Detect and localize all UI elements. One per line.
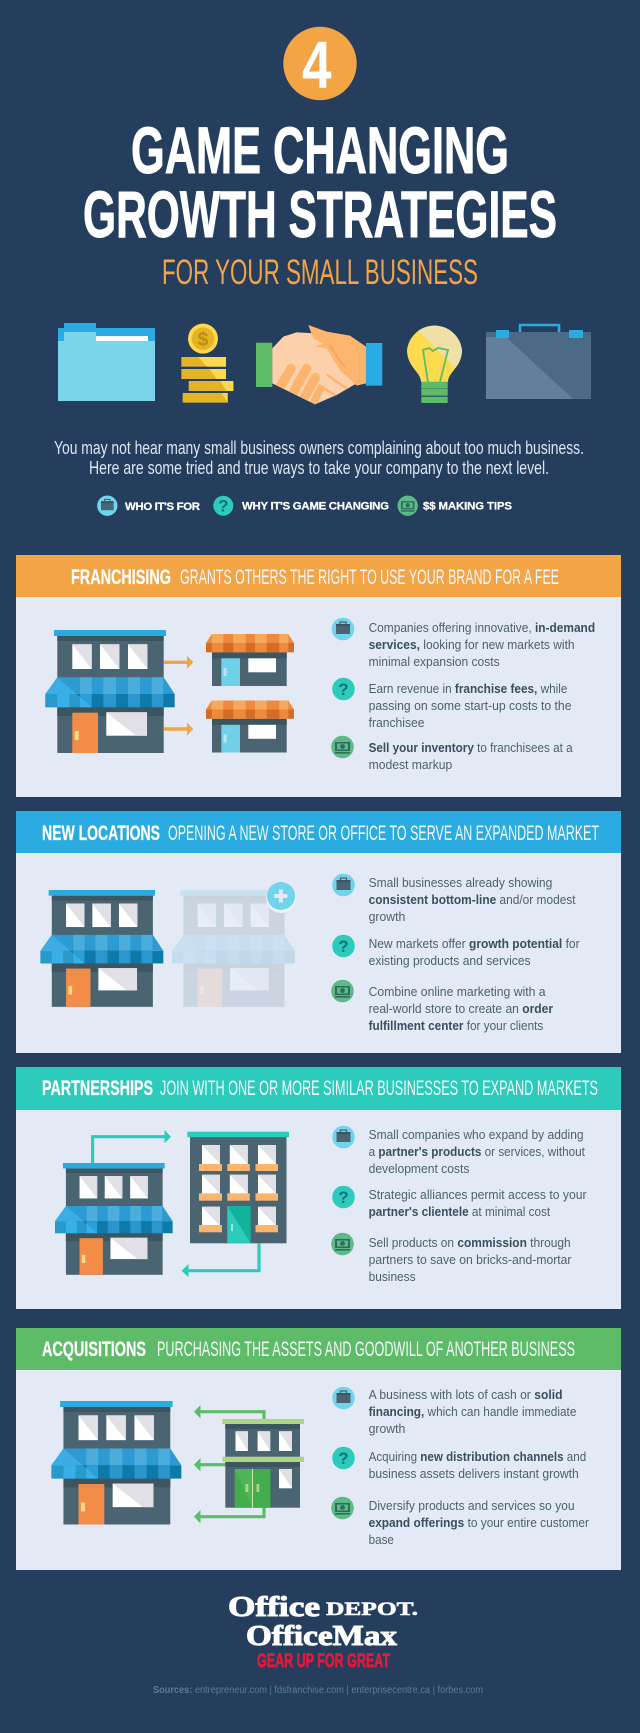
bullet: money making tip: [331, 980, 553, 1033]
icon: folder: [58, 323, 155, 401]
legend item: why it's game changing: [213, 496, 389, 516]
bullet: who it's for: A business with lots of cash or solid: [369, 1387, 563, 1402]
bullet: why it's game changing: existing products and services: [369, 953, 531, 968]
bullet: who it's for: [332, 874, 576, 924]
header: partnerships: [16, 1067, 621, 1110]
logo: Office Depot OfficeMax: [228, 1591, 418, 1672]
bullet: why it's game changing: Strategic alliances permit access to your: [369, 1187, 587, 1202]
panel: acquisitions: [16, 1328, 621, 1570]
header: new locations: NEW LOCATIONS: [42, 822, 160, 845]
bullet: why it's game changing: [332, 1447, 586, 1481]
bullet: who it's for: Companies offering innovative, in-demand: [369, 620, 595, 635]
logo: Office Depot OfficeMax: Office: [228, 1591, 320, 1623]
illustration: store and partner building: [55, 1130, 289, 1277]
sources: Sources: entrepreneur.com | fdsfranchise.com | enterprisecentre.ca | forbes.com: [153, 1685, 483, 1696]
illustration: store and ghost new store: [40, 882, 296, 1007]
illustration: store acquiring a smaller building: [51, 1401, 304, 1524]
bullet: why it's game changing: ?: [338, 1449, 349, 1468]
header: acquisitions: ACQUISITIONS: [42, 1338, 146, 1361]
bullet: money making tip: fulfillment center for your clients: [369, 1018, 544, 1033]
legend: [97, 496, 512, 516]
bullet: money making tip: business: [369, 1269, 416, 1284]
logo: Office Depot OfficeMax: GEAR UP FOR GREAT: [257, 1651, 390, 1672]
intro text: [54, 438, 584, 478]
bullet: money making tip: [331, 736, 573, 772]
bullet: money making tip: real-world store to create an order: [369, 1001, 553, 1016]
bullet: money making tip: expand offerings to your entire customer: [369, 1515, 590, 1530]
bullet: why it's game changing: partner's clientele at minimal cost: [369, 1204, 551, 1219]
bullet: who it's for: Small companies who expand by adding: [369, 1127, 584, 1142]
bullet: who it's for: [332, 618, 595, 669]
bullet: why it's game changing: [332, 678, 572, 730]
bullet: who it's for: services, looking for new markets with: [369, 637, 575, 652]
panel: partnerships: [16, 1067, 621, 1309]
header: acquisitions: [16, 1328, 621, 1370]
bullet: why it's game changing: Acquiring new distribution channels and: [369, 1449, 586, 1464]
logo: Office Depot OfficeMax: OfficeMax: [246, 1620, 398, 1652]
bullet: who it's for: minimal expansion costs: [369, 654, 500, 669]
badge: number 4: [283, 27, 357, 103]
icon: handshake: [256, 325, 382, 407]
bullet: why it's game changing: ?: [338, 937, 349, 956]
bullet: who it's for: development costs: [369, 1161, 470, 1176]
legend item: making tips: $$ MAKING TIPS: [423, 500, 512, 512]
bullet: who it's for: consistent bottom-line and/or modest: [369, 892, 576, 907]
panel: new locations: [16, 811, 621, 1053]
bullet: why it's game changing: passing on some start-up costs to the: [369, 698, 572, 713]
bullet: money making tip: partners to save on bricks-and-mortar: [369, 1252, 572, 1267]
bullet: who it's for: [332, 1126, 585, 1176]
legend item: who it's for: [97, 496, 200, 516]
header: new locations: [16, 811, 621, 853]
header: franchising: [16, 555, 621, 597]
bullet: why it's game changing: ?: [338, 680, 349, 699]
bullet: why it's game changing: business assets delivers instant growth: [369, 1466, 579, 1481]
bullet: who it's for: Small businesses already showing: [369, 875, 552, 890]
illustration: store with franchise shops: [45, 630, 294, 753]
header: partnerships: PARTNERSHIPS: [42, 1077, 153, 1100]
bullet: money making tip: base: [369, 1532, 394, 1547]
title: [83, 113, 557, 251]
bullet: money making tip: Sell your inventory to franchisees at a: [369, 740, 573, 755]
icon: light bulb: [407, 326, 462, 403]
icon: coins: $: [198, 330, 209, 351]
bullet: who it's for: [332, 1387, 576, 1436]
legend item: why it's game changing: ?: [218, 496, 228, 516]
bullet: why it's game changing: ?: [338, 1188, 349, 1207]
bullet: who it's for: growth: [369, 1421, 405, 1436]
icon: briefcase: [486, 325, 591, 399]
bullet: money making tip: [331, 1233, 572, 1284]
logo: Office Depot OfficeMax: DEPOT.: [326, 1599, 418, 1620]
bullet: money making tip: modest markup: [369, 757, 452, 772]
bullet: why it's game changing: [332, 1186, 587, 1219]
bullet: who it's for: financing, which can handle immediate: [369, 1404, 576, 1419]
bullet: money making tip: Diversify products and services so you: [369, 1498, 575, 1513]
bullet: why it's game changing: [332, 935, 580, 968]
icon: coins: [181, 324, 233, 403]
badge: number 4: 4: [302, 28, 332, 103]
bullet: money making tip: [331, 1497, 590, 1547]
legend item: why it's game changing: WHY IT'S GAME CHANGING: [242, 500, 389, 512]
bullet: why it's game changing: New markets offer growth potential for: [369, 936, 580, 951]
panel: franchising: [16, 555, 621, 797]
bullet: why it's game changing: Earn revenue in franchise fees, while: [369, 681, 567, 696]
bullet: who it's for: growth: [369, 909, 405, 924]
legend item: who it's for: WHO IT'S FOR: [125, 501, 200, 513]
bullet: who it's for: a partner's products or services, without: [369, 1144, 585, 1159]
bullet: money making tip: Sell products on commission through: [369, 1235, 571, 1250]
bullet: why it's game changing: franchisee: [369, 715, 424, 730]
header: franchising: FRANCHISING: [71, 566, 171, 589]
bullet: money making tip: Combine online marketing with a: [369, 984, 546, 999]
legend item: making tips: [398, 496, 512, 516]
